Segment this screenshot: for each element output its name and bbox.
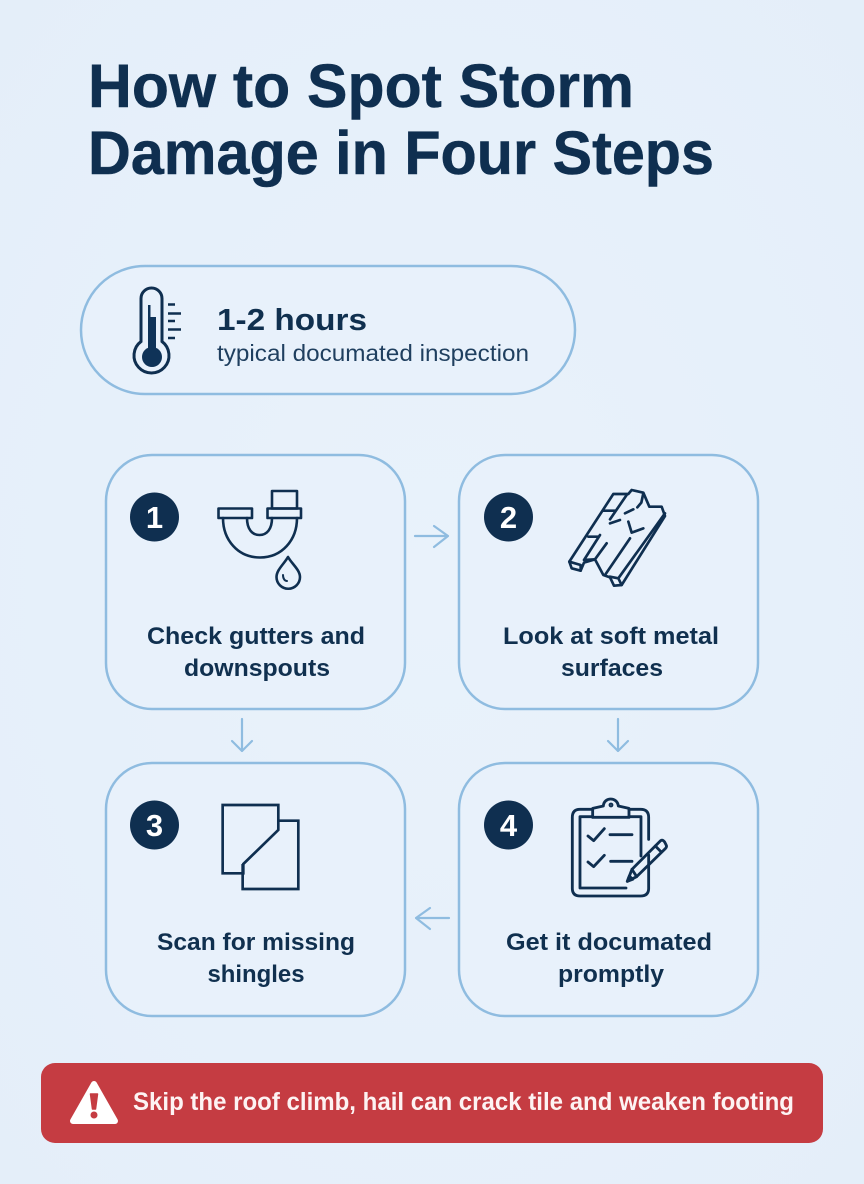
title	[88, 52, 714, 187]
step number 3	[130, 800, 179, 850]
panel: step 4: promptly	[558, 961, 665, 988]
arrow: step 1 to 2	[415, 526, 448, 547]
icon: cracked tile	[569, 490, 665, 586]
step number 1	[130, 492, 179, 542]
step label: Get it documated	[506, 929, 712, 956]
stat caption: typical documated inspection	[217, 340, 529, 366]
icon: warning triangle	[73, 1084, 115, 1121]
panel: step 1	[106, 455, 405, 709]
step number 3: 3	[146, 808, 163, 843]
arrow: step 2 to 4	[608, 719, 628, 751]
title: How to Spot Storm	[88, 52, 634, 120]
title: Damage in Four Steps	[88, 119, 714, 187]
icon: leaking pipe	[218, 491, 301, 589]
panel: step 4	[459, 763, 758, 1016]
warning text: Skip the roof climb, hail can crack tile and weaken footing	[133, 1088, 794, 1116]
step label: Check gutters and	[147, 623, 365, 650]
step number 1: 1	[146, 500, 163, 535]
arrow: step 1 to 3	[232, 719, 252, 751]
panel: inspection time	[81, 266, 575, 394]
step number 2	[484, 492, 533, 542]
stat value: 1-2 hours	[217, 302, 367, 337]
warning banner	[41, 1063, 823, 1143]
icon: missing shingles	[223, 805, 298, 889]
step label: Look at soft metal	[503, 623, 719, 650]
panel: step 2	[459, 455, 758, 709]
step number 4	[484, 800, 533, 850]
panel: step 3: shingles	[208, 961, 304, 988]
panel: step 1: downspouts	[184, 655, 330, 682]
step number 4: 4	[500, 808, 518, 843]
step number 2: 2	[500, 500, 517, 535]
arrow: step 4 to 3	[416, 908, 449, 929]
icon: clipboard	[572, 799, 667, 896]
icon: thermometer	[134, 288, 181, 373]
panel: step 2: surfaces	[561, 655, 663, 682]
step label: Scan for missing	[157, 929, 355, 956]
panel: step 3	[106, 763, 405, 1016]
